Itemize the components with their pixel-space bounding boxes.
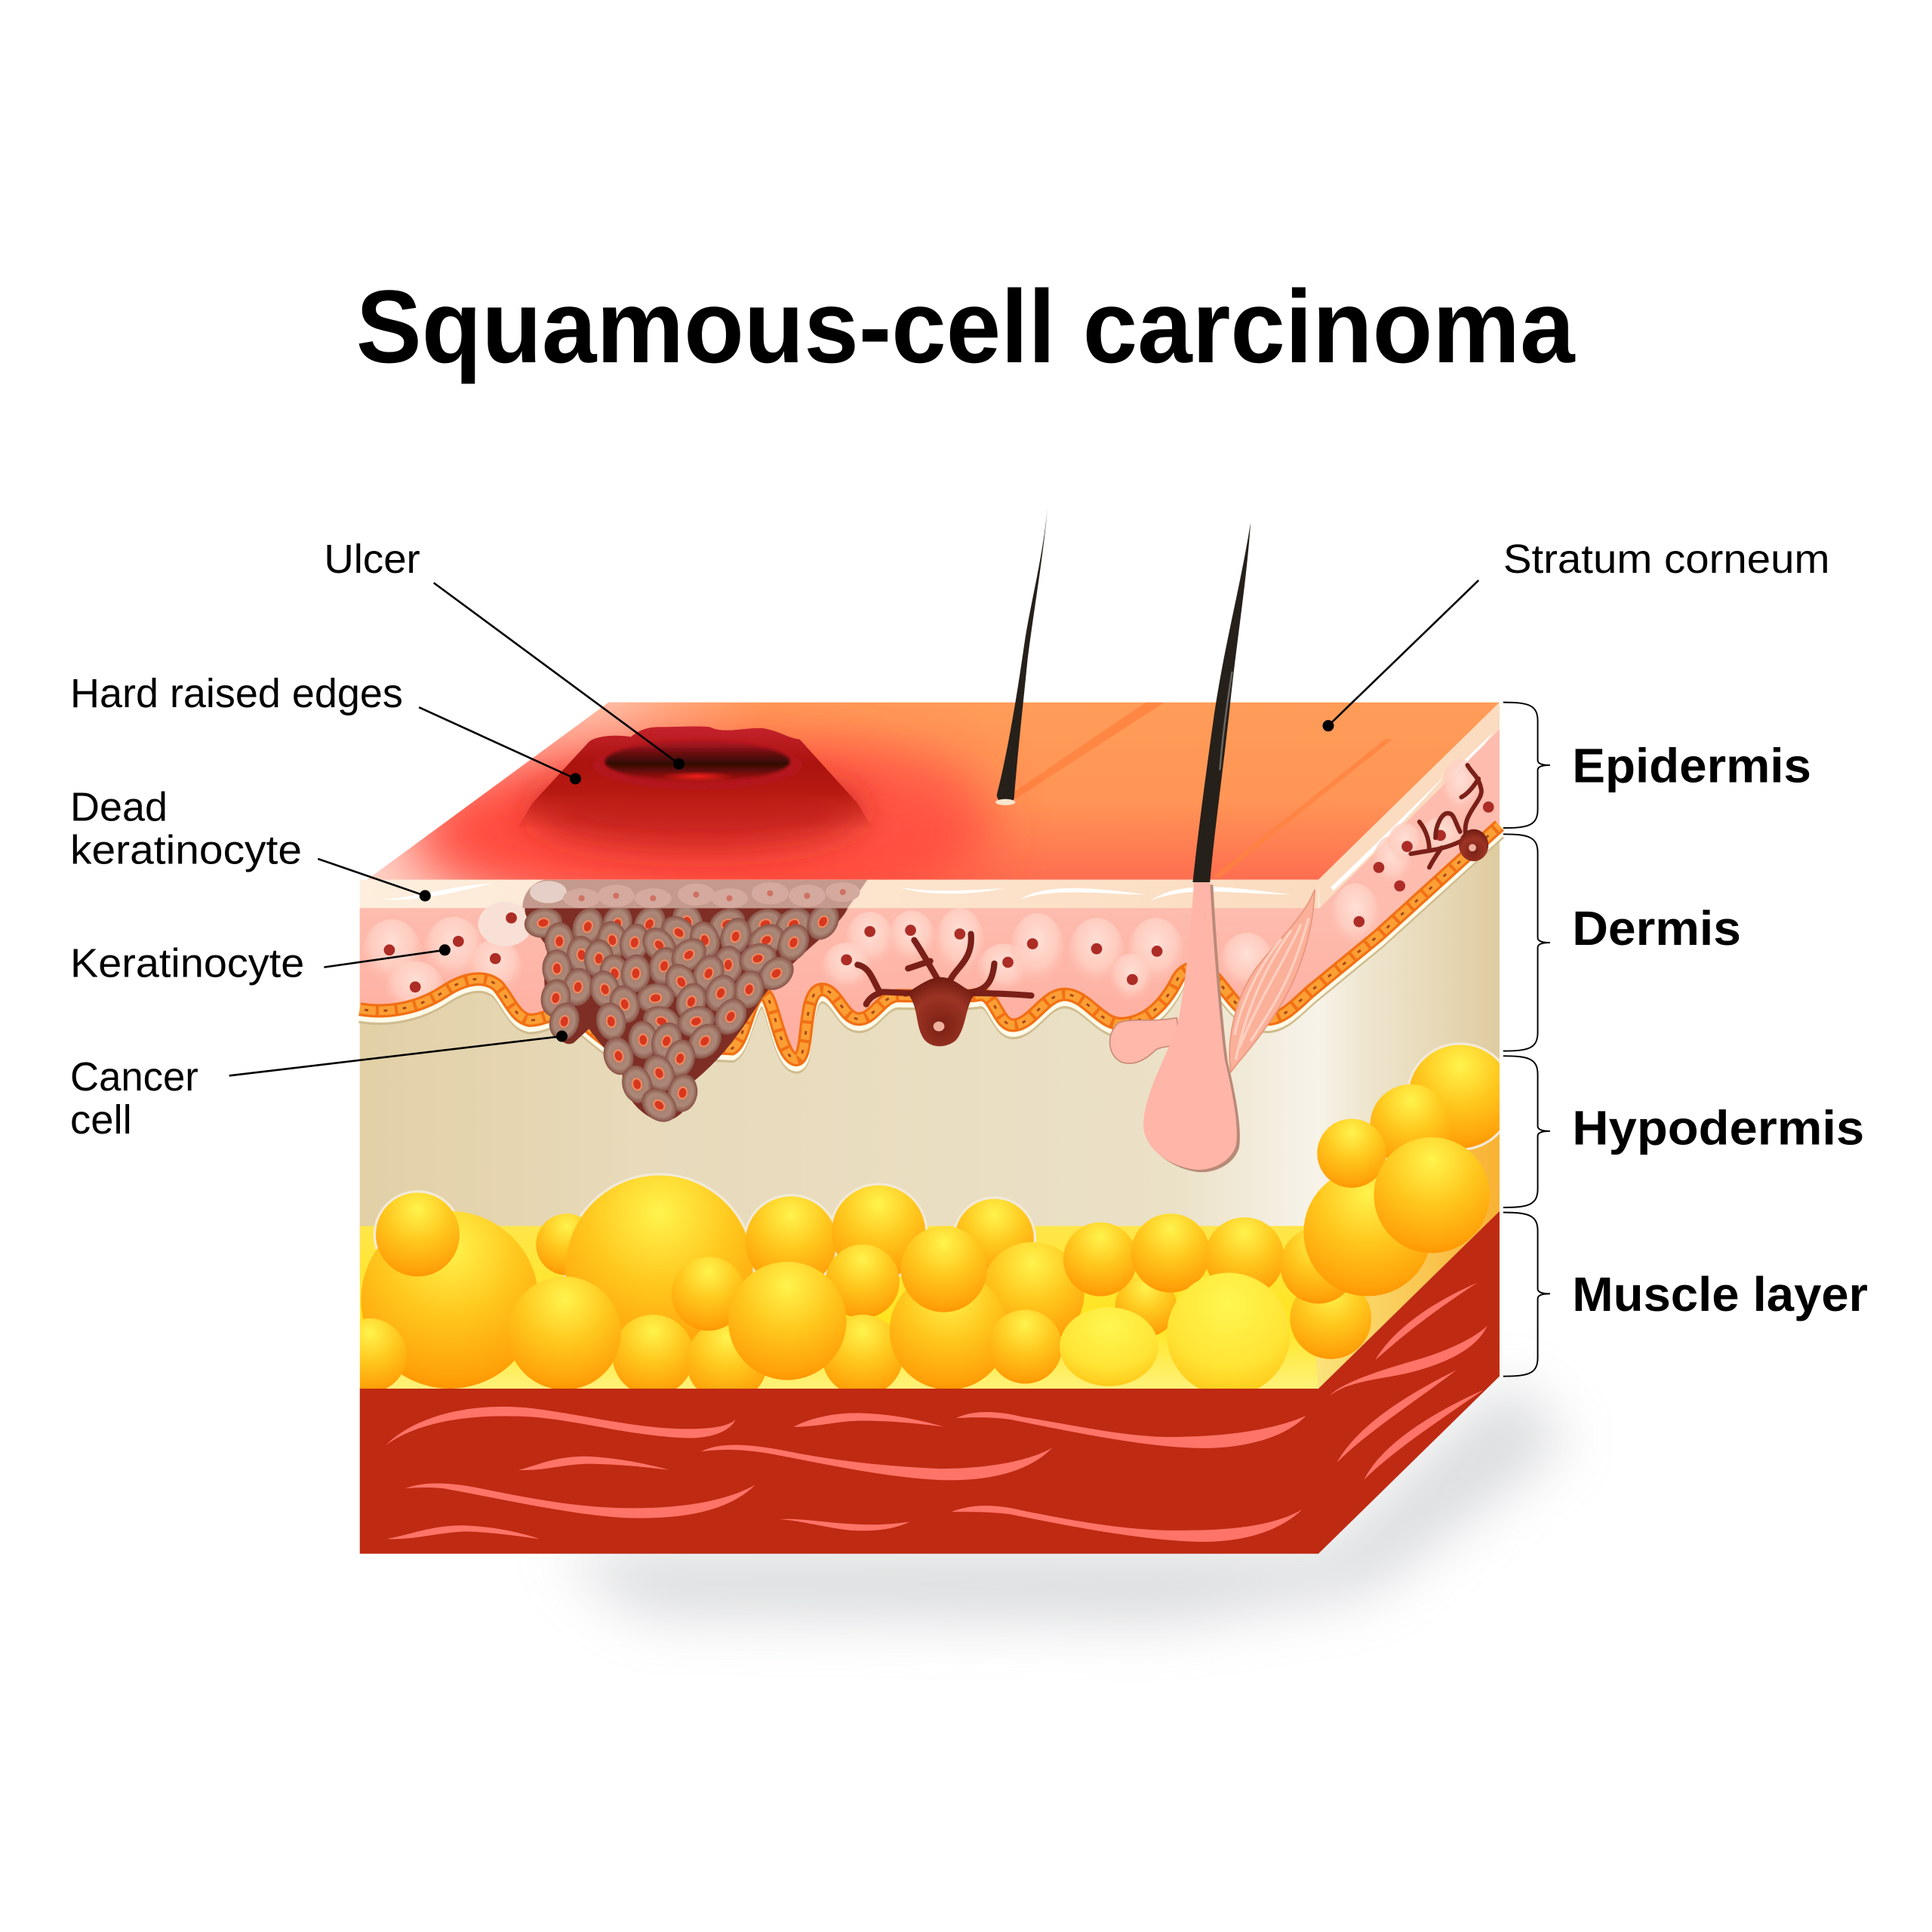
ulcer cone bbox=[518, 727, 872, 828]
tumour in stratum corneum bbox=[522, 880, 867, 908]
arrector pili muscle bbox=[1229, 890, 1315, 1072]
label: Cancer cell: cell bbox=[70, 1097, 132, 1143]
label: Stratum corneum bbox=[1322, 537, 1829, 731]
bracket: Dermis bbox=[1503, 834, 1741, 1051]
ulcer crater bbox=[605, 742, 790, 781]
label: Stratum corneum: Stratum corneum bbox=[1503, 537, 1829, 582]
label: Ulcer: Ulcer bbox=[324, 537, 420, 582]
label: Dead keratinocyte: keratinocyte bbox=[70, 827, 302, 872]
tumour cells bbox=[522, 898, 845, 1129]
bracket: Dermis: Dermis bbox=[1572, 902, 1741, 955]
top surface: stratum corneum bbox=[367, 702, 1500, 880]
label: Ulcer bbox=[324, 537, 685, 770]
label: Dead keratinocyte bbox=[70, 784, 431, 901]
muscle layer bbox=[360, 1211, 1500, 1554]
label: Cancer cell bbox=[70, 1031, 568, 1143]
label: Hard raised edges bbox=[70, 671, 581, 784]
hair right bbox=[1192, 522, 1251, 882]
skin block illustration bbox=[333, 509, 1515, 1554]
tumour base bbox=[525, 908, 848, 1121]
bracket: Muscle layer: Muscle layer bbox=[1572, 1268, 1868, 1321]
bracket: Epidermis: Epidermis bbox=[1572, 740, 1811, 793]
drop shadow under block bbox=[555, 1380, 1567, 1622]
bracket: Epidermis bbox=[1503, 703, 1811, 828]
keratinocyte nuclei bbox=[384, 801, 1494, 992]
bracket: Hypodermis bbox=[1503, 1056, 1864, 1208]
tumour: cancer cell mass bbox=[522, 880, 867, 1129]
melanocyte, front bbox=[857, 934, 1032, 1046]
ulcer centre bbox=[660, 771, 734, 781]
title: Squamous-cell carcinoma bbox=[356, 269, 1576, 385]
label: Keratinocyte: Keratinocyte bbox=[70, 941, 304, 986]
epidermis pink layer bbox=[360, 730, 1500, 1060]
label: Keratinocyte bbox=[70, 941, 451, 986]
ulcer bbox=[518, 727, 872, 828]
basal layer bbox=[360, 826, 1500, 1067]
label: Cancer cell: Cancer bbox=[70, 1054, 198, 1100]
melanocyte, right side bbox=[1411, 765, 1488, 867]
sebaceous gland bbox=[1110, 1018, 1180, 1063]
ulcer rim bbox=[592, 740, 802, 790]
dermis and hypodermis background bbox=[360, 703, 1500, 1404]
muscle fibres bbox=[386, 1283, 1487, 1542]
hair follicle bbox=[1143, 882, 1240, 1172]
label: Dead keratinocyte: Dead bbox=[70, 784, 168, 829]
stratum corneum front band bbox=[360, 703, 1500, 908]
hair left bbox=[995, 509, 1048, 805]
keratinocyte cells bbox=[362, 759, 1478, 1018]
label: Hard raised edges: Hard raised edges bbox=[70, 671, 403, 716]
fat layer bbox=[333, 1042, 1515, 1402]
bracket: Hypodermis: Hypodermis bbox=[1572, 1102, 1864, 1155]
bracket: Muscle layer bbox=[1503, 1213, 1868, 1377]
